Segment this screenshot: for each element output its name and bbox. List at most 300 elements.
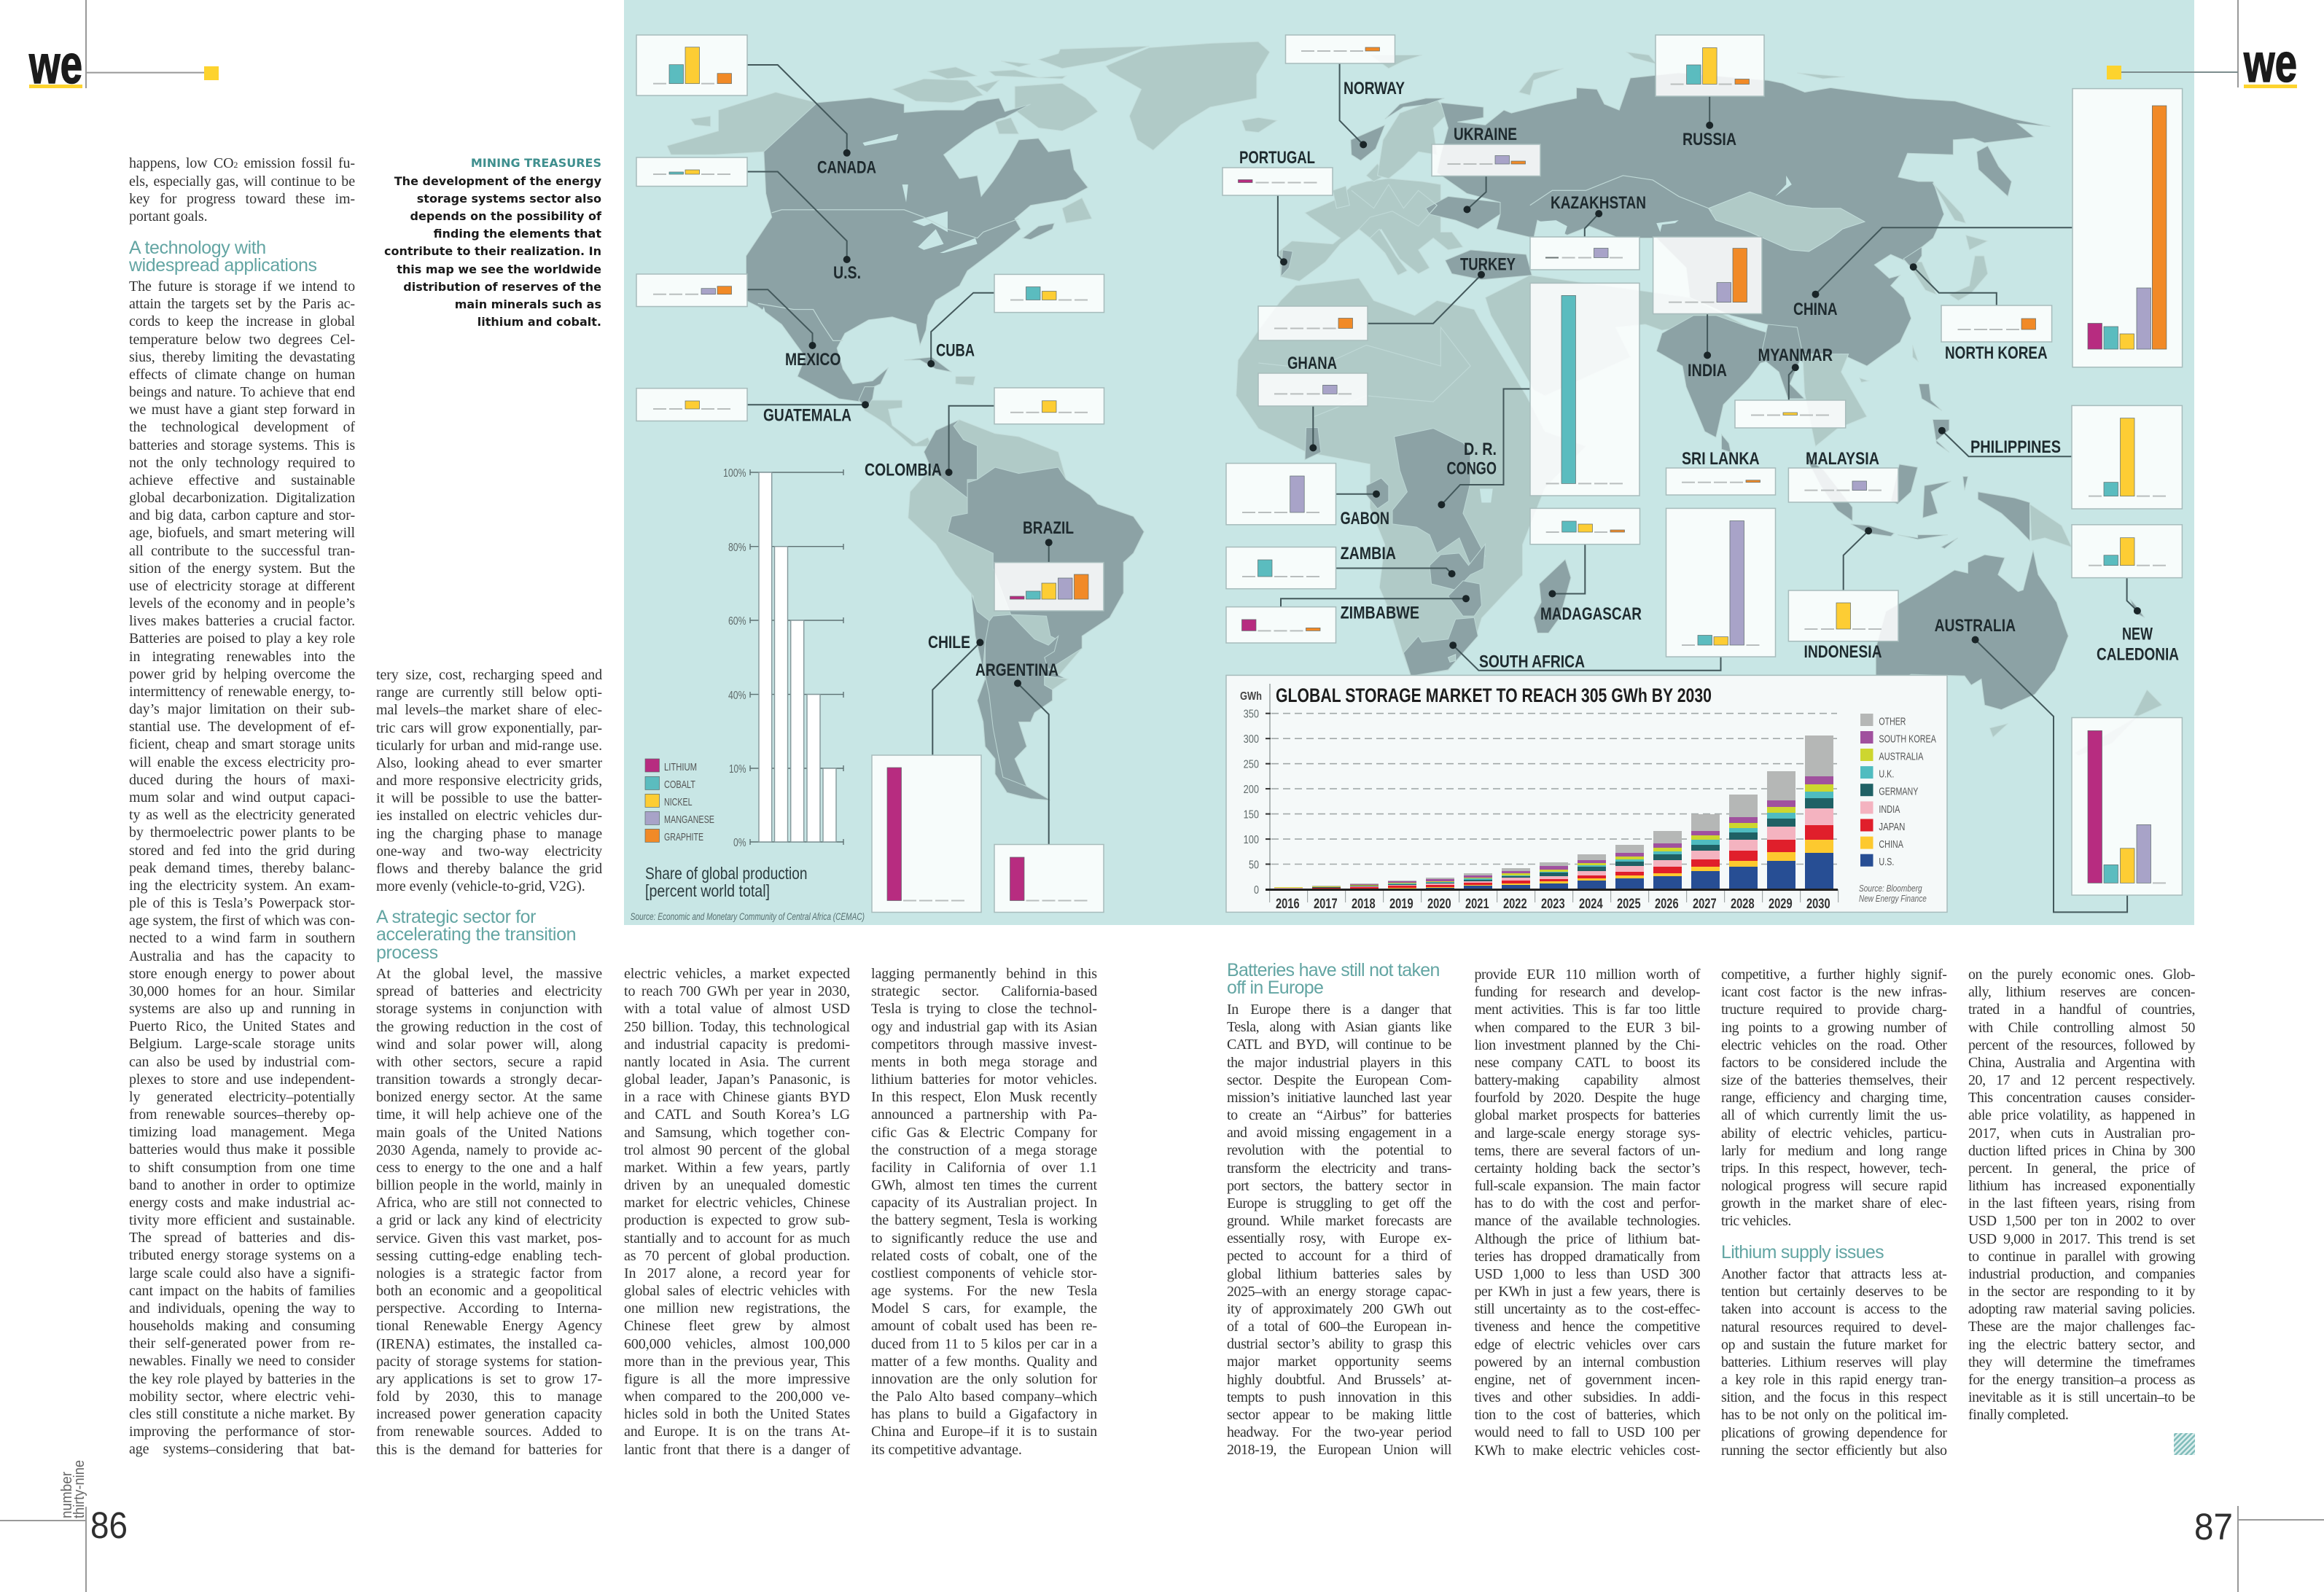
country: North Korea xyxy=(1910,263,2052,363)
country: Gabon xyxy=(1226,464,1389,528)
share chart axis labels: 10% xyxy=(729,763,746,776)
y axis values xyxy=(1244,709,1259,897)
heading: a technology with widespread applications: widespread applications xyxy=(129,255,317,276)
text column: page 86 column 2 bottom: service. Given this vast market, pos- xyxy=(376,1230,602,1246)
text column: page 86 column 3: nantly located in Asia. The current xyxy=(624,1054,850,1070)
text column: page 87 column 3 top: ability of electric vehicles, particu- xyxy=(1721,1125,1946,1142)
text column: page 87 column 2: tiveness and hence the competitive xyxy=(1474,1319,1700,1335)
share chart axis labels: 60% xyxy=(728,615,746,628)
country: Zambia: ZAMBIA xyxy=(1341,544,1396,563)
text column: page 86 column 2 bottom: nologies is a strategic factor from xyxy=(376,1265,602,1281)
text column: page 86 column 2 top: ing the charging phase to manage xyxy=(376,826,602,842)
country: U.S. xyxy=(636,157,861,283)
country: Malaysia: MALAYSIA xyxy=(1806,449,1879,469)
East Asia and Philippines xyxy=(1760,73,2011,452)
text column: page 87 column 2: has to do with the cost and perfor- xyxy=(1474,1195,1700,1211)
text column: page 87 column 2: funding for research and develop- xyxy=(1474,984,1700,1000)
callout: mining treasures: The development of the energy xyxy=(394,174,601,188)
text column: page 86 column 2 bottom: ary applications is set to grow 17- xyxy=(376,1371,602,1387)
text column: page 86 column 3: 250 billion. Today, this technological xyxy=(624,1019,850,1035)
year labels: 2018 xyxy=(1352,897,1376,912)
country: Australia: AUSTRALIA xyxy=(1935,616,2016,636)
country: South Africa xyxy=(1449,508,1776,672)
Portugal bars xyxy=(1238,179,1317,184)
y axis values: 50 xyxy=(1249,859,1259,872)
heading: batteries have still not taken off in Europe: Batteries have still not taken xyxy=(1227,960,1440,980)
year labels: 2019 xyxy=(1389,897,1413,912)
Ukraine bars xyxy=(1448,156,1525,165)
text column: page 86 column 1: achieve effective and sustainable xyxy=(129,472,355,488)
text column: page 86 column 1: power grid by helping overcome the xyxy=(129,666,355,682)
text column: page 86 column 2 bottom: perspective. According to Interna- xyxy=(376,1300,602,1316)
country: Philippines xyxy=(1938,405,2182,509)
heading: a strategic sector xyxy=(376,907,576,963)
text column: page 86 column 1: stored and fed into the grid during xyxy=(129,843,355,859)
text column: page 86 column 1: lives makes batteries a crucial factor. xyxy=(129,613,355,629)
D. R. Congo bars xyxy=(1546,295,1623,484)
text column: page 86 column 1: use of electricity storage at different xyxy=(129,578,355,594)
storage chart legend: GERMANY xyxy=(1879,786,1918,798)
callout: mining treasures: this map we see the worldwide xyxy=(397,262,601,276)
callout: mining treasures: distribution of reserves of the xyxy=(403,280,601,294)
text column: page 86 column 2 bottom: tional Renewable Energy Agency xyxy=(376,1318,602,1334)
legend: minerals: GRAPHITE xyxy=(664,831,703,843)
text column: page 86 column 2 bottom: storage systems in conjunction with xyxy=(376,1001,602,1017)
text column: page 86 column 3: global leader, Japan’s Panasonic, is xyxy=(624,1072,850,1088)
storage chart legend: SOUTH KOREA xyxy=(1879,733,1936,745)
text column: page 87 column 4: adopting raw material saving policies. xyxy=(1968,1301,2195,1317)
header left: logo and rule: we xyxy=(28,34,82,95)
text column: page 87 column 2: Although the price of lithium bat- xyxy=(1474,1231,1700,1247)
text column: page 86 column 1: duced during the hours of maxi- xyxy=(129,772,355,788)
Kazakhstan bars xyxy=(1545,248,1623,258)
year labels: 2017 xyxy=(1314,897,1338,912)
country: New Caledonia: NEW xyxy=(2122,625,2153,644)
year labels: 2026 xyxy=(1655,897,1679,912)
text column: page 86 column 3: stantially and to account for as much xyxy=(624,1230,850,1246)
text column: page 86 column 4: to significantly reduce the use and xyxy=(871,1230,1097,1246)
text column: page 86 column 1: timizing load management. Mega xyxy=(129,1124,355,1140)
header right: logo and rule: we xyxy=(2243,33,2297,93)
caption: share of global production xyxy=(645,864,808,900)
text column: page 87 column 3 bottom xyxy=(1721,1265,1946,1459)
text column: page 86 column 1: tributed energy storage systems on a xyxy=(129,1247,355,1263)
text column: page 86 column 2 top: flows and thereby balance the grid xyxy=(376,861,602,877)
text column: page 87 column 1: sector. Despite the European Com- xyxy=(1227,1072,1451,1088)
text column: page 86 column 1: beings and nature. To achieve that end xyxy=(129,384,355,400)
country: India xyxy=(1653,237,1762,381)
text column: page 87 column 3 top: larly for medium and long range xyxy=(1721,1143,1946,1159)
text column: page 86 column 1: intermittency of renewable energy, to- xyxy=(129,684,355,700)
text column: page 86 column 3: lantic front that there is a danger of xyxy=(624,1442,850,1458)
text column: intro ending xyxy=(129,155,355,225)
text column: page 86 column 2 bottom xyxy=(376,966,602,1458)
country: Argentina xyxy=(975,660,1104,913)
text column: page 86 column 4: the battery segment, Tesla is working xyxy=(871,1212,1097,1228)
Cuba bars xyxy=(1010,287,1088,300)
panel: world map background xyxy=(624,0,2194,925)
text column: page 87 column 4: duction lifted prices in China by 300 xyxy=(1968,1143,2195,1159)
text column: page 86 column 1: cant impact on the habits of families xyxy=(129,1283,355,1299)
text column: page 86 column 1: ty as well as the electricity generated xyxy=(129,807,355,823)
chart: share of global production scale xyxy=(723,467,843,849)
text column: page 87 column 1: mission’s initiative launched last year xyxy=(1227,1090,1451,1106)
text column: page 86 column 3: global sales of electric vehicles with xyxy=(624,1283,850,1299)
text column: page 87 column 4: This concentration causes consider- xyxy=(1968,1090,2195,1106)
country: Mexico xyxy=(636,274,841,370)
country: Zambia xyxy=(1226,544,1456,589)
text column: page 87 column 1: 2025–with an energy storage capac- xyxy=(1227,1284,1451,1300)
text column: intro ending: portant goals. xyxy=(129,208,207,225)
year labels: 2027 xyxy=(1693,897,1717,912)
callout: mining treasures: depends on the possibility of xyxy=(410,209,601,223)
text column: page 87 column 1: essentially rosy, with Europe ex- xyxy=(1227,1230,1451,1246)
text column: page 86 column 1: ing the electricity system. An exam- xyxy=(129,878,355,894)
text column: page 86 column 2 bottom: the growing reduction in the cost of xyxy=(376,1019,602,1035)
country: Turkey xyxy=(1258,255,1516,340)
text column: page 86 column 1: systems are also up and running in xyxy=(129,1001,355,1017)
text column: page 87 column 3 top xyxy=(1721,966,1946,1230)
text column: page 87 column 1: tempts to push innovation in this xyxy=(1227,1389,1451,1405)
country: Madagascar xyxy=(1530,508,1642,624)
country: Malaysia xyxy=(1788,449,1898,502)
text column: page 86 column 4: the construction of a mega storage xyxy=(871,1142,1097,1158)
text column: page 87 column 4: 20, 17 and 12 percent respectively. xyxy=(1968,1072,2195,1088)
text column: page 87 column 1: Europe is struggling to get off the xyxy=(1227,1195,1451,1211)
country: Sri Lanka xyxy=(1666,449,1776,495)
text column: page 86 column 2 bottom: increased power generation capacity xyxy=(376,1406,602,1422)
text column: page 86 column 2 bottom: with other sectors, secure a rapid xyxy=(376,1054,602,1070)
text column: page 86 column 3: Chinese fleet grew by almost xyxy=(624,1318,850,1334)
text column: page 86 column 4: China and Europe–if it is to sustain xyxy=(871,1424,1097,1440)
country: Ukraine xyxy=(1432,125,1540,213)
Myanmar bars xyxy=(1751,413,1829,415)
China bars xyxy=(2088,106,2167,349)
text column: page 87 column 2: nese company CATL to boost its xyxy=(1474,1055,1700,1071)
country: India: INDIA xyxy=(1688,361,1727,381)
text column: page 87 column 4: USD 9,000 in 2017. This trend is set xyxy=(1968,1231,2195,1247)
text column: page 87 column 1: of a total of 600–the European in- xyxy=(1227,1319,1451,1335)
storage chart legend: U.S. xyxy=(1879,856,1894,868)
text column: page 86 column 1: cles still constitute a niche market. By xyxy=(129,1406,355,1422)
Chile bars xyxy=(887,768,964,901)
text column: page 86 column 1: mobility sector, where electric vehi- xyxy=(129,1389,355,1405)
text column: page 87 column 3 bottom: sition, and the focus in this respect xyxy=(1721,1389,1946,1405)
text column: page 87 column 3 top: competitive, a further highly signif- xyxy=(1721,967,1946,983)
Ghana bars xyxy=(1274,385,1352,394)
text column: page 86 column 1: and individuals, opening the way to xyxy=(129,1300,355,1316)
text column: page 86 column 2 bottom: time, it will help achieve one of the xyxy=(376,1107,602,1123)
text column: page 87 column 2: fourfold by 2020. Despite the huge xyxy=(1474,1090,1700,1106)
header right: logo and rule xyxy=(2107,0,2297,93)
y axis values: 250 xyxy=(1244,759,1259,771)
text column: page 86 column 4: capacity of its Australian project. In xyxy=(871,1195,1097,1211)
callout: mining treasures: lithium and cobalt. xyxy=(477,315,601,329)
text column: page 86 column 1: age, biofuels, and smart metering will xyxy=(129,525,355,541)
text column: page 87 column 3 bottom: tention but certainly deserves to be xyxy=(1721,1284,1946,1300)
heading: batteries have still not taken off in Europe xyxy=(1227,961,1440,997)
heading: a strategic sector: process xyxy=(376,943,438,963)
text column: page 87 column 3 bottom: running the sector efficiently but also xyxy=(1721,1443,1946,1459)
chart gridlines xyxy=(1271,714,1837,865)
text column: page 87 column 1: ground. While market forecasts are xyxy=(1227,1213,1451,1229)
text column: page 87 column 1: highly doubtful. And Brussels’ at- xyxy=(1227,1372,1451,1388)
text column: page 87 column 4: percent. In general, the price of xyxy=(1968,1160,2195,1177)
text column: page 86 column 4: GWh, almost ten times the current xyxy=(871,1177,1097,1193)
text column: page 87 column 1: transform the electricity and trans- xyxy=(1227,1160,1451,1177)
text column: page 86 column 3: to reach 700 GWh per year in 2030, xyxy=(624,983,850,999)
text column: page 86 column 2 top: tery size, cost, recharging speed and xyxy=(376,667,602,683)
country: Madagascar: MADAGASCAR xyxy=(1540,604,1642,624)
country: North Korea: NORTH KOREA xyxy=(1945,343,2048,363)
text column: intro ending: happens, low CO2 emission fossil fu- xyxy=(129,155,355,171)
text column: page 87 column 2: tives and other subsidies. In addi- xyxy=(1474,1389,1700,1405)
text column: page 86 column 1: the technological development of xyxy=(129,419,355,435)
country: Colombia: COLOMBIA xyxy=(865,460,942,480)
country: Kazakhstan: KAZAKHSTAN xyxy=(1551,193,1646,213)
text column: page 86 column 3: hicles sold in both the United States xyxy=(624,1406,850,1422)
map source note: Source: Economic and Monetary Community of Central Africa (CEMAC) xyxy=(631,911,865,922)
country: Sri Lanka: SRI LANKA xyxy=(1682,449,1760,469)
heading: lithium supply issues: Lithium supply issues xyxy=(1721,1242,1884,1263)
text column: page 87 column 1: to create an “Airbus” for batteries xyxy=(1227,1107,1451,1123)
text column: page 87 column 4: finally completed. xyxy=(1968,1407,2068,1423)
text column: page 87 column 3 bottom: batteries. Lithium reserves will play xyxy=(1721,1354,1946,1370)
text column: page 86 column 2 bottom: spread of batteries and electricity xyxy=(376,983,602,999)
country: Argentina: ARGENTINA xyxy=(975,660,1058,680)
text column: page 86 column 3: and Europe. It is on the trans At- xyxy=(624,1424,850,1440)
text column: page 86 column 1: peak demand times, thereby balanc- xyxy=(129,860,355,876)
country: Portugal: PORTUGAL xyxy=(1239,148,1315,168)
Malaysia bars xyxy=(1804,481,1882,491)
text column: page 86 column 1: band to another in order to optimize xyxy=(129,1177,355,1193)
country: Philippines: PHILIPPINES xyxy=(1970,437,2061,457)
share chart axis labels: 100% xyxy=(723,467,746,480)
text column: page 86 column 4: innovation are the only solution for xyxy=(871,1371,1097,1387)
North America xyxy=(667,42,1270,446)
caption: share of global production: Share of global production xyxy=(645,864,808,883)
text column: page 87 column 4: lithium has increased exponentially xyxy=(1968,1178,2195,1194)
New Caledonia bars xyxy=(2089,538,2166,566)
text column: page 87 column 3 bottom: taken into account is access to the xyxy=(1721,1301,1946,1317)
text column: page 87 column 4: for the energy transition–a process as xyxy=(1968,1372,2195,1388)
text column: page 86 column 1: ly generated electricity–potentially xyxy=(129,1089,355,1105)
text column: page 86 column 1: not the only technology required to xyxy=(129,455,355,471)
text column: page 87 column 4 xyxy=(1968,966,2195,1424)
country: New Caledonia: CALEDONIA xyxy=(2097,644,2179,664)
text column: page 86 column 1: The spread of batteries and dis- xyxy=(129,1230,355,1246)
country: Colombia xyxy=(865,388,1104,480)
text column: page 86 column 2 bottom: transition towards a strongly decar- xyxy=(376,1072,602,1088)
year labels: 2016 xyxy=(1276,897,1300,912)
Philippines bars xyxy=(2089,418,2166,497)
storage chart source note: New Energy Finance xyxy=(1859,893,1927,904)
text column: page 86 column 2 bottom: 2030 Agenda, namely to provide ac- xyxy=(376,1142,602,1158)
text column: page 86 column 4: cific Gas & Electric Company for xyxy=(871,1125,1097,1141)
Mexico bars xyxy=(653,286,732,295)
text column: page 86 column 3: and industrial capacity is predomi- xyxy=(624,1037,850,1053)
text column: page 87 column 3 top: icant cost factor is the new infras- xyxy=(1721,984,1946,1000)
text column: page 87 column 3 top: tructure required to provide charg- xyxy=(1721,1002,1946,1018)
text column: page 86 column 1: newables. Finally we need to consider xyxy=(129,1353,355,1369)
text column: page 86 column 1: to shift consumption from one time xyxy=(129,1160,355,1176)
text column: page 87 column 1: sector appear to be making little xyxy=(1227,1407,1451,1423)
callout: mining treasures: contribute to their realization. In xyxy=(384,244,601,258)
text column: page 86 column 3: driven by an unequaled domestic xyxy=(624,1177,850,1193)
year labels: 2030 xyxy=(1806,897,1830,912)
text column: page 87 column 1: global lithium batteries sales by xyxy=(1227,1266,1451,1282)
share chart axis labels: 40% xyxy=(728,690,746,702)
text column: page 86 column 4: Model S cars, for example, the xyxy=(871,1300,1097,1316)
South Africa bars xyxy=(1682,520,1760,646)
text column: page 86 column 3: electric vehicles, a market expected xyxy=(624,966,850,982)
text column: page 86 column 1: by thermoelectric power plants to be xyxy=(129,824,355,840)
footer right: page number 87: 87 xyxy=(2194,1506,2233,1548)
text column: page 86 column 4: matter of a few months. Quality and xyxy=(871,1354,1097,1370)
country: Zimbabwe: ZIMBABWE xyxy=(1341,604,1419,623)
text column: page 86 column 3: market for electric vehicles, Chinese xyxy=(624,1195,850,1211)
heading: a strategic sector: A strategic sector for xyxy=(376,907,536,927)
year labels: 2023 xyxy=(1541,897,1565,912)
country: Chile xyxy=(872,633,983,913)
country: Ghana: GHANA xyxy=(1287,354,1337,373)
country: Turkey: TURKEY xyxy=(1460,255,1516,274)
text column: page 86 column 4: Tesla is trying to close the technol- xyxy=(871,1001,1097,1017)
legend: minerals: MANGANESE xyxy=(664,813,714,826)
text column: page 86 column 1: age systems–considering that bat- xyxy=(129,1441,355,1457)
text column: page 86 column 4: facility in California of over 1.1 xyxy=(871,1160,1097,1176)
heading: batteries have still not taken off in Europe: off in Europe xyxy=(1227,978,1323,998)
text column: page 86 column 2 top: tric cars will grow exponentially, par- xyxy=(376,720,602,736)
country: Ukraine: UKRAINE xyxy=(1454,125,1517,144)
text column: page 86 column 4: related costs of cobalt, one of the xyxy=(871,1248,1097,1264)
text column: page 86 column 1: in integrating renewables into the xyxy=(129,649,355,665)
text column: page 86 column 1: Batteries are poised to play a key role xyxy=(129,631,355,647)
share chart white bars xyxy=(759,472,836,842)
text column: page 87 column 4: able price volatility, as happened in xyxy=(1968,1107,2195,1123)
text column: page 87 column 1: In Europe there is a danger that xyxy=(1227,1002,1451,1018)
text column: page 87 column 3 top: growth in the market share of elec- xyxy=(1721,1195,1946,1211)
y axis values: 0 xyxy=(1254,884,1259,897)
text column: page 86 column 4: announced a partnership with Pa- xyxy=(871,1107,1097,1123)
Russia bars xyxy=(1671,48,1750,85)
storage chart legend: AUSTRALIA xyxy=(1879,751,1923,762)
text column: page 87 column 2: tion to the cost of batteries, which xyxy=(1474,1407,1700,1423)
text column: page 86 column 1: attain the targets set by the Paris ac- xyxy=(129,296,355,312)
text column: page 86 column 1: 30,000 homes for an hour. Similar xyxy=(129,983,355,999)
text column: page 86 column 2 bottom: main goals of the United Nations xyxy=(376,1125,602,1141)
text column: page 86 column 3: in a race with Chinese giants BYD xyxy=(624,1089,850,1105)
text column: page 87 column 3 top: nological progress will secure rapid xyxy=(1721,1178,1946,1194)
text column: page 86 column 2 bottom: pacity of storage systems for station- xyxy=(376,1354,602,1370)
storage chart source note: Source: Bloomberg xyxy=(1859,883,1922,894)
country: Guatemala xyxy=(636,389,869,426)
text column: page 87 column 3 top: all of which currently limit the us- xyxy=(1721,1107,1946,1123)
text column: page 87 column 4: USD 1,500 per ton in 2002 to over xyxy=(1968,1213,2195,1229)
storage chart legend: JAPAN xyxy=(1879,821,1905,833)
year labels: 2020 xyxy=(1427,897,1451,912)
text column: page 86 column 4: ments in both mega storage and xyxy=(871,1054,1097,1070)
text column: page 86 column 1: plexes to store and use independent- xyxy=(129,1072,355,1088)
text column: page 87 column 3 bottom: has to be not only on the political im- xyxy=(1721,1407,1946,1423)
Zambia bars xyxy=(1242,560,1319,577)
text column: page 87 column 2: edge of electric vehicles over cars xyxy=(1474,1337,1700,1353)
share chart gridlines xyxy=(750,469,843,845)
text column: page 87 column 4: in the sector are responding to it by xyxy=(1968,1284,2195,1300)
text column: page 86 column 2 bottom: bonized energy sector. At the same xyxy=(376,1089,602,1105)
country: Canada xyxy=(636,35,876,178)
text column: page 86 column 1: all contribute to the successful tran- xyxy=(129,543,355,559)
country: Indonesia: INDONESIA xyxy=(1804,642,1882,662)
text column: page 87 column 3 top: ing points to a growing number of xyxy=(1721,1020,1946,1036)
text column: page 86 column 3: production is expected to grow sub- xyxy=(624,1212,850,1228)
storage chart legend: INDIA xyxy=(1879,803,1900,816)
text column: page 86 column 1: sition of the energy system. But the xyxy=(129,561,355,577)
text column: page 87 column 2: still uncertainty as to the cost-effec- xyxy=(1474,1301,1700,1317)
text column: page 87 column 2 xyxy=(1474,966,1700,1459)
text column: page 86 column 2 bottom: billion people in the world, mainly in xyxy=(376,1177,602,1193)
y axis values: 100 xyxy=(1244,834,1259,846)
text column: page 86 column 3: and CATL and South Korea’s LG xyxy=(624,1107,850,1123)
y axis values: 300 xyxy=(1244,733,1259,746)
text column: page 86 column 3: figure is all the more impressive xyxy=(624,1371,850,1387)
footer left: page number 86 and issue xyxy=(0,1460,128,1592)
text column: page 87 column 4: to continue in parallel with growing xyxy=(1968,1249,2195,1265)
text column: page 86 column 4: costliest components of vehicle stor- xyxy=(871,1265,1097,1281)
text column: page 86 column 3: In 2017 alone, a record year for xyxy=(624,1265,850,1281)
text column: page 86 column 2 bottom: cess to energy to the one and a half xyxy=(376,1160,602,1176)
text column: page 87 column 1: dustrial sector’s ability to grasp this xyxy=(1227,1336,1451,1352)
text column: page 87 column 4: China, Australia and Argentina with xyxy=(1968,1055,2195,1071)
year labels: 2025 xyxy=(1617,897,1641,912)
text column: page 87 column 2: when compared to the EUR 3 bil- xyxy=(1474,1020,1700,1036)
country: Canada: CANADA xyxy=(817,157,876,178)
text column: page 86 column 1: and big data, carbon capture and stor- xyxy=(129,507,355,523)
text column: page 86 column 2 top xyxy=(376,667,602,894)
text column: intro ending: key for progress toward these im- xyxy=(129,191,355,207)
text column: page 87 column 4: inevitable as it is still uncertain–to be xyxy=(1968,1389,2195,1405)
Indonesia bars xyxy=(1804,603,1882,630)
text column: page 87 column 2: engine, net of government incen- xyxy=(1474,1372,1700,1388)
Norway bars xyxy=(1301,47,1379,52)
heading: a strategic sector: accelerating the transition xyxy=(376,924,576,945)
text column: page 86 column 2 top: more evenly (vehicle-to-grid, V2G). xyxy=(376,878,585,894)
year separators xyxy=(1270,889,1838,902)
text column: page 87 column 2: ment activities. This is far too little xyxy=(1474,1002,1700,1018)
text column: page 87 column 2: powered by an internal combustion xyxy=(1474,1354,1700,1370)
country: Cuba: CUBA xyxy=(936,341,975,360)
text column: page 87 column 2: global market prospects for batteries xyxy=(1474,1107,1700,1123)
text column: page 86 column 2 top: mal levels–the market share of elec- xyxy=(376,702,602,718)
text column: page 87 column 2: certainty holding back the sector’s xyxy=(1474,1160,1700,1177)
footer left: page number 86 and issue: number xyxy=(59,1472,75,1518)
text column: page 87 column 3 top: size of the batteries themselves, their xyxy=(1721,1072,1946,1088)
text column: page 87 column 4: trated in a handful of countries, xyxy=(1968,1002,2195,1018)
text column: page 86 column 3: when compared to the 200,000 ve- xyxy=(624,1389,850,1405)
country: China xyxy=(1793,89,2183,367)
year labels: 2021 xyxy=(1465,897,1489,912)
text column: page 87 column 4: with Chile controlling almost 50 xyxy=(1968,1020,2195,1036)
callout: mining treasures: storage systems sector also xyxy=(417,192,601,206)
text column: page 86 column 1: ficient, cheap and smart storage units xyxy=(129,736,355,752)
text column: page 87 column 2: would need to fall to USD 100 per xyxy=(1474,1424,1700,1440)
text column: page 87 column 3 top: tric vehicles. xyxy=(1721,1213,1791,1229)
share chart axis labels: 80% xyxy=(728,542,746,554)
country: Portugal xyxy=(1223,148,1333,265)
text column: page 87 column 1 xyxy=(1227,1001,1451,1459)
text column: page 86 column 4: lithium batteries for motor vehicles. xyxy=(871,1072,1097,1088)
text column: page 86 column 4: duced from 11 to 5 kilos per car in a xyxy=(871,1336,1097,1352)
